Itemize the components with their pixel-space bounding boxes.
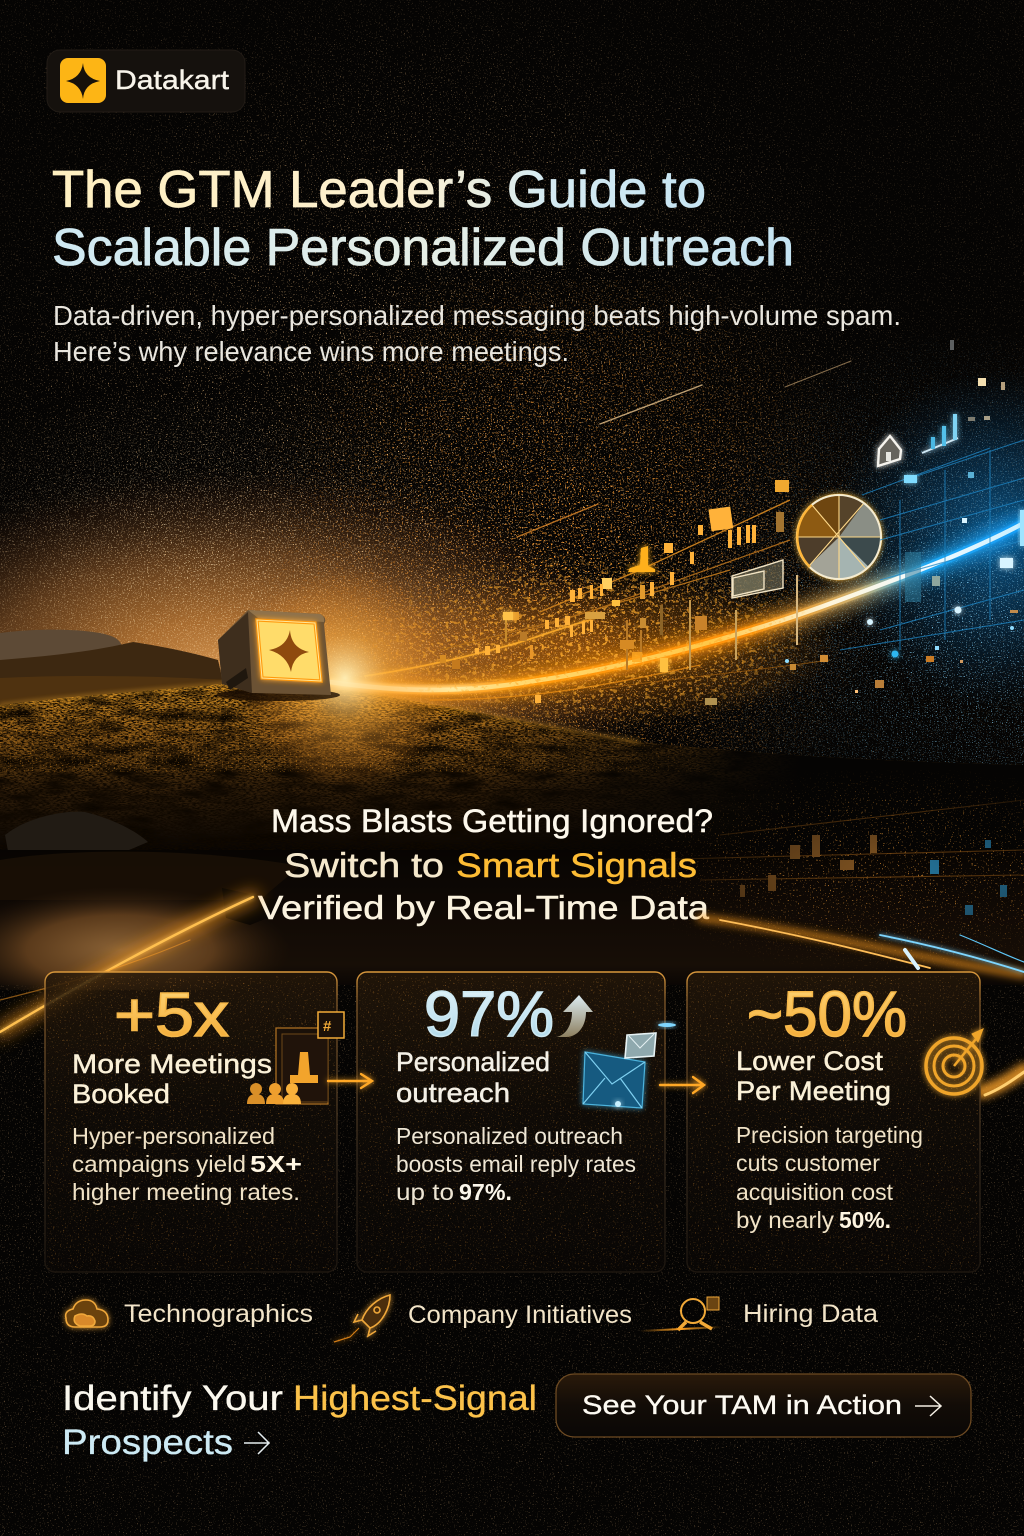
subtitle: Data-driven, hyper-personalized messaging beats high-volume spam. — [53, 300, 901, 331]
card body text: up to — [396, 1179, 454, 1205]
call to action button: See Your TAM in Action — [582, 1390, 902, 1420]
call to action text: Highest-Signal — [293, 1379, 537, 1418]
mid-page tagline — [258, 803, 713, 926]
icon: meeting document and people — [215, 1012, 344, 1105]
icon: logo square — [60, 58, 106, 103]
call to action text — [62, 1379, 537, 1462]
card body text — [736, 1122, 923, 1233]
card heading: outreach — [396, 1078, 510, 1108]
stat: +5x: +5x — [114, 981, 229, 1050]
card body text: Precision targeting — [736, 1122, 923, 1148]
call to action button — [556, 1374, 971, 1437]
card body text: higher meeting rates. — [72, 1179, 300, 1205]
panel: more meetings booked — [45, 972, 344, 1272]
mid-page tagline: Verified by Real-Time Data — [258, 889, 710, 926]
card body text: cuts customer — [736, 1150, 880, 1176]
lower energy streaks — [0, 897, 1024, 1095]
bar chart icon — [922, 414, 958, 453]
core glow at the cube — [225, 565, 465, 785]
title: The GTM Leader’s Guide to — [52, 161, 706, 219]
rock on the shoreline — [5, 812, 148, 862]
arrow: card one to two — [328, 1074, 372, 1088]
card body text: Hyper-personalized — [72, 1123, 275, 1149]
card body text: boosts email reply rates — [396, 1151, 636, 1177]
signal label: company initiatives: Company Initiatives — [408, 1301, 632, 1329]
stat: 97%: 97% — [424, 978, 554, 1050]
button glow line — [530, 1370, 975, 1372]
subtitle — [53, 300, 901, 367]
distant hills — [0, 630, 225, 710]
cube logo monument — [216, 610, 340, 701]
brand name: Datakart — [115, 65, 230, 95]
card body text — [72, 1123, 302, 1205]
call to action text: Identify Your — [62, 1379, 283, 1418]
card body text — [396, 1123, 636, 1205]
card body text: Personalized outreach — [396, 1123, 623, 1149]
reflected data in the water — [620, 770, 1024, 980]
glowing data beam — [330, 523, 1024, 700]
reflective water — [0, 850, 1024, 990]
blue data network — [785, 340, 1024, 693]
stat: ~50%: ~50% — [747, 978, 907, 1050]
icon: target and arrow — [926, 1029, 983, 1094]
house icon — [878, 436, 901, 466]
arrow: card two to three — [660, 1077, 704, 1093]
grassy hillside — [0, 682, 1024, 850]
card floor line — [40, 1272, 985, 1274]
pie chart icon — [797, 495, 881, 579]
card heading — [72, 1049, 272, 1109]
card body text: 97%. — [459, 1179, 512, 1205]
mid-page tagline: Switch to — [284, 847, 444, 885]
panel: lower cost per meeting — [687, 972, 983, 1272]
card heading: Lower Cost — [736, 1046, 884, 1076]
signal label: technographics: Technographics — [124, 1300, 313, 1328]
logo badge — [47, 50, 245, 112]
orange data city — [372, 480, 934, 728]
card heading — [396, 1047, 550, 1108]
card heading — [736, 1046, 891, 1106]
icon: cloud stack — [66, 1300, 108, 1327]
card body text: acquisition cost — [736, 1179, 894, 1205]
mid-page tagline: Smart Signals — [456, 847, 697, 885]
panel: personalized outreach — [357, 972, 676, 1272]
subtitle: Here’s why relevance wins more meetings. — [53, 336, 569, 367]
card heading: Per Meeting — [736, 1076, 891, 1106]
arrow after prospects — [244, 1432, 269, 1454]
title — [52, 161, 794, 277]
icon: magnifier and hiring chart — [640, 1297, 722, 1331]
card body text: by nearly — [736, 1207, 835, 1233]
dashboard panel icon — [732, 560, 783, 598]
mid-page tagline: Mass Blasts Getting Ignored? — [271, 803, 713, 839]
icon: upward arrow — [556, 995, 593, 1037]
signal row — [66, 1295, 878, 1342]
card heading: More Meetings — [72, 1049, 272, 1079]
icon: meeting document and people: # — [323, 1018, 332, 1035]
card heading: Personalized — [396, 1047, 550, 1077]
signal label: hiring data: Hiring Data — [743, 1300, 878, 1328]
card heading: Booked — [72, 1079, 170, 1109]
card body text: 50%. — [839, 1207, 891, 1233]
title: Scalable Personalized Outreach — [52, 219, 794, 277]
icon: rocket — [334, 1295, 390, 1342]
card body text: campaigns yield — [72, 1151, 246, 1177]
card body text: 5X+ — [250, 1151, 302, 1177]
icon: blue envelope — [538, 1023, 676, 1108]
shooting star streaks — [517, 361, 851, 537]
call to action text: Prospects — [62, 1423, 233, 1462]
